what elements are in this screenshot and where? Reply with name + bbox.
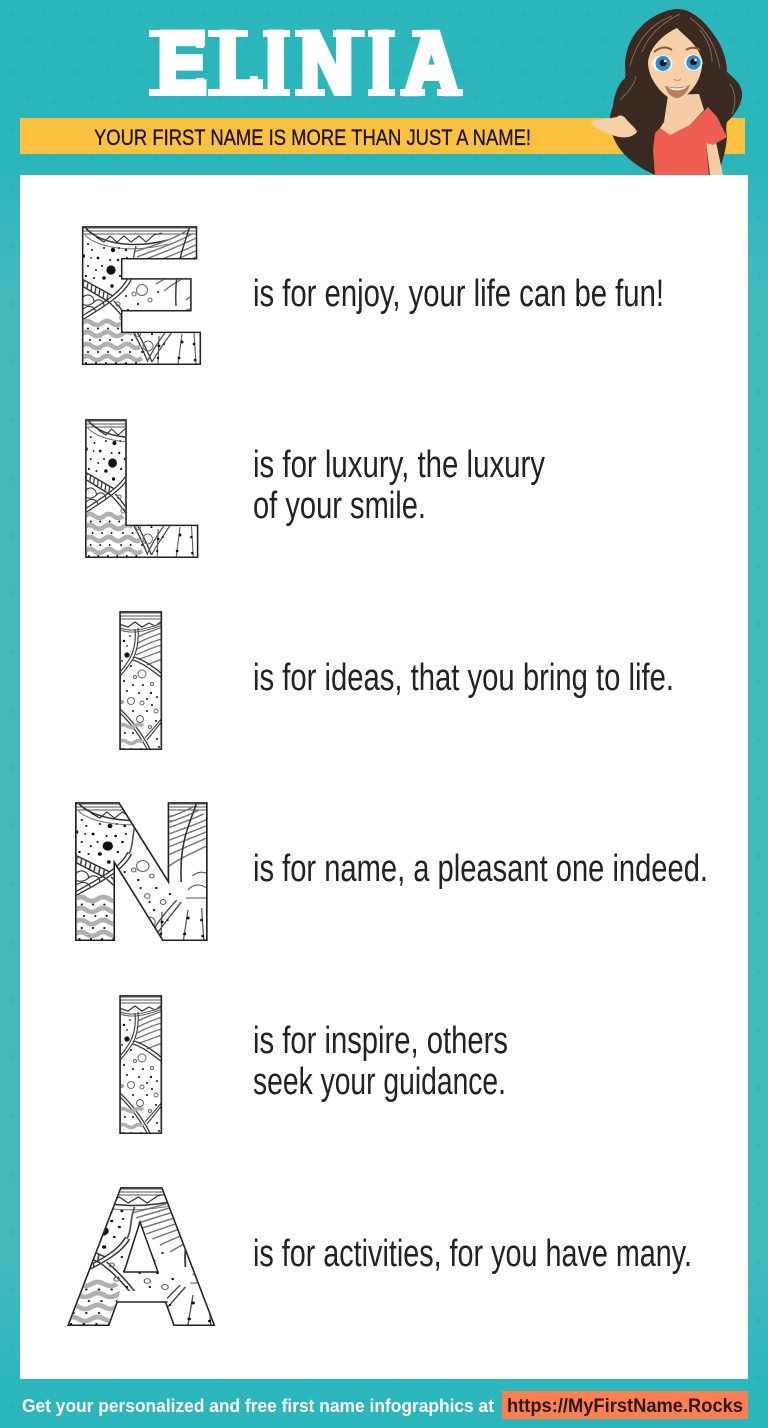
- letter I: I: [113, 962, 168, 1167]
- mouth: [665, 85, 690, 98]
- letter I row: [119, 611, 672, 750]
- text I second: [253, 1020, 508, 1103]
- letter A: A: [72, 1154, 211, 1359]
- hand: [590, 116, 637, 137]
- footer link badge: https://MyFirstName.Rocks: [507, 1396, 743, 1417]
- text L: of your smile.: [253, 485, 426, 527]
- shirt: [653, 107, 727, 175]
- second letter I row: [119, 995, 507, 1134]
- text I second: seek your guidance.: [253, 1061, 506, 1103]
- letter L: [85, 419, 198, 558]
- letter N: N: [69, 769, 214, 974]
- right eye: [684, 54, 702, 70]
- title: ELINIA: [158, 15, 458, 111]
- text I second: is for inspire, others: [253, 1020, 508, 1062]
- nose: [674, 79, 681, 80]
- text L: [253, 444, 545, 527]
- letter L: L: [79, 386, 197, 590]
- letter I: [119, 995, 162, 1134]
- letter A: A: [72, 1154, 211, 1359]
- letter N: N: [69, 769, 214, 974]
- arm: [706, 142, 723, 175]
- banner bar: [20, 118, 745, 154]
- white content panel: [20, 175, 748, 1379]
- letter E: [82, 226, 202, 365]
- letter A row: [67, 1187, 690, 1326]
- letter L row: [85, 419, 545, 558]
- hair highlights: [620, 14, 735, 114]
- letter I: I: [113, 578, 168, 783]
- letter N: [75, 802, 208, 941]
- letter I: I: [113, 578, 168, 783]
- letter E row: [82, 226, 662, 365]
- letter I: [119, 611, 162, 750]
- letter N row: [75, 802, 706, 941]
- hair: [610, 9, 742, 175]
- letter I: I: [113, 962, 168, 1167]
- face: [648, 28, 702, 101]
- banner text: YOUR FIRST NAME IS MORE THAN JUST A NAME!: [94, 125, 531, 150]
- letter A: [67, 1187, 216, 1326]
- footer text: Get your personalized and free first name infographics at: [22, 1396, 494, 1416]
- letter E: E: [76, 194, 202, 398]
- letter L: L: [79, 386, 197, 590]
- eyebrows: [654, 48, 700, 52]
- text L: is for luxury, the luxury: [253, 444, 545, 486]
- left eye: [652, 56, 672, 72]
- illustration: woman presenting: [590, 9, 742, 175]
- letter E: E: [76, 194, 202, 398]
- neck and chest: [658, 94, 704, 135]
